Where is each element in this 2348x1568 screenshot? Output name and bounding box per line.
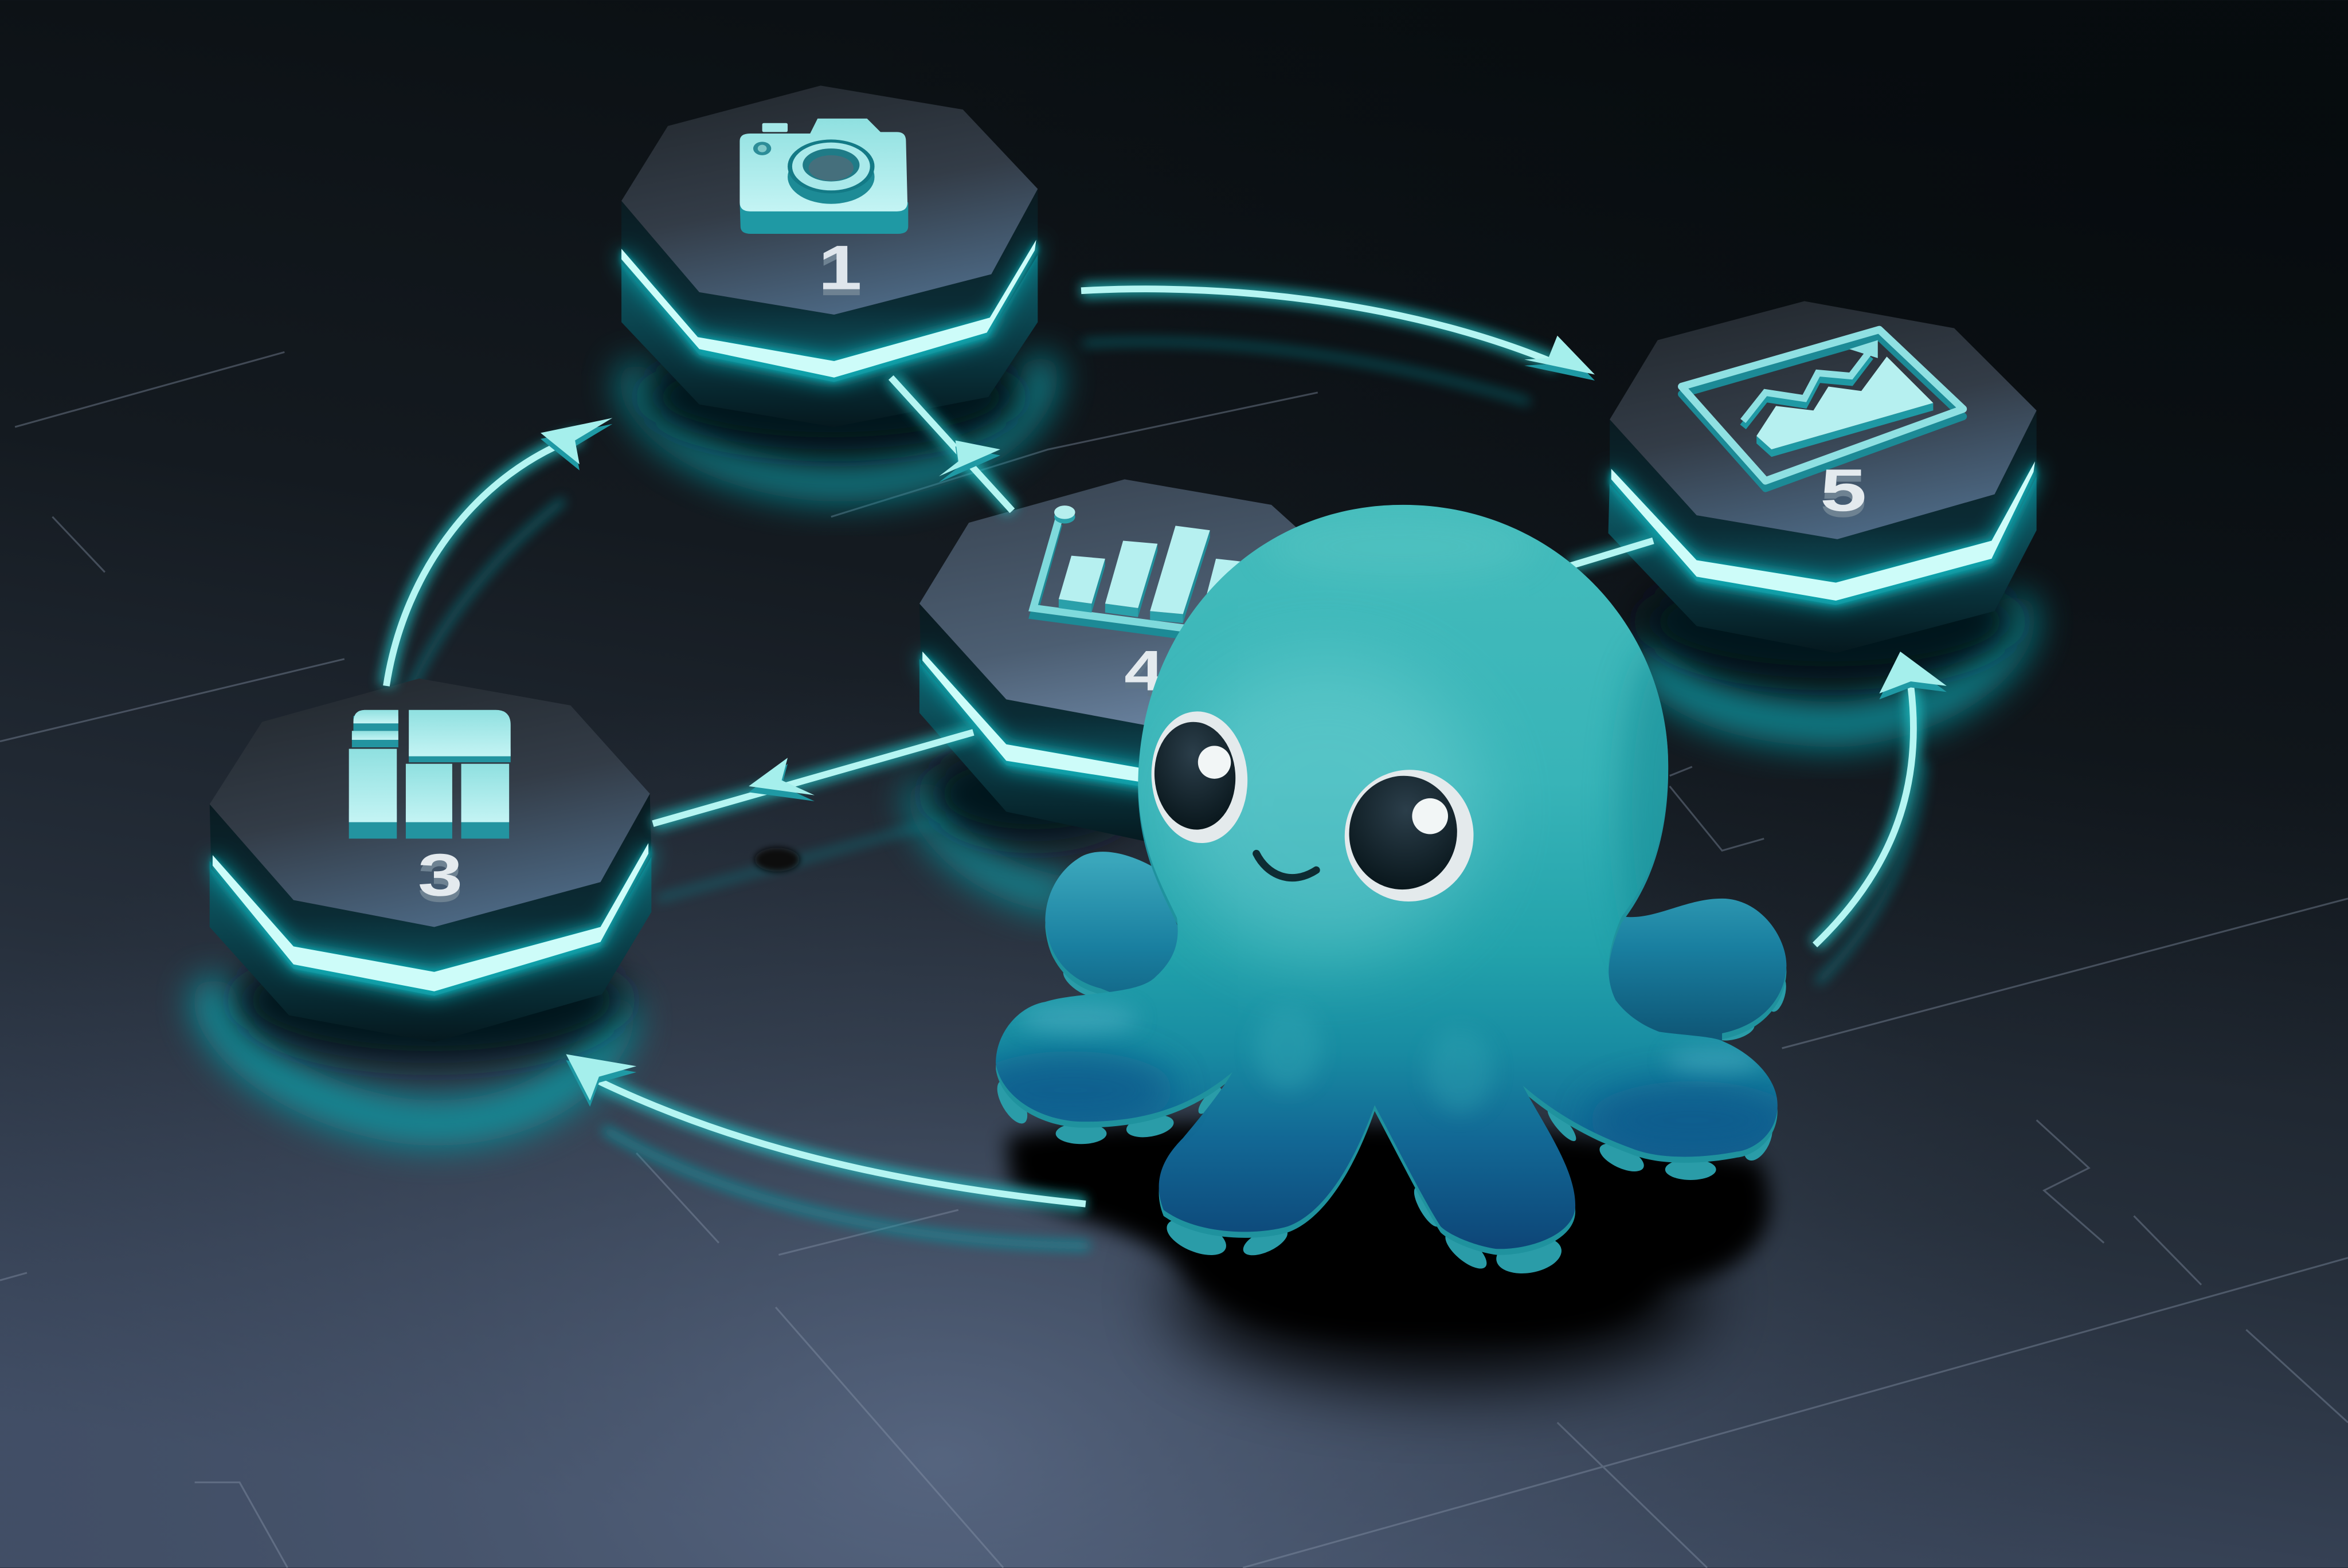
arrow: 1 to 5: [1081, 289, 1595, 381]
small dark mark on floor: [755, 848, 800, 872]
number 1: 1: [818, 239, 862, 309]
icon: bar chart: [1033, 505, 1243, 637]
number 3: 3: [418, 848, 463, 915]
number 4: 4: [1124, 645, 1164, 708]
octopus mascot: [966, 505, 1797, 1278]
floor glow reflections: [214, 342, 2014, 1246]
panel: platform 3 treemap: [210, 679, 651, 1042]
body and front arms: [966, 505, 1797, 1255]
arrow: 4 to 3: [653, 732, 973, 824]
arms: back: [1045, 852, 1786, 1055]
panel: platform 4 bar chart: [919, 479, 1318, 846]
panel: platform 5 line chart: [1609, 301, 2037, 653]
number 1: 1: [818, 233, 862, 303]
arrow: 3 to 1: [386, 418, 612, 686]
eye: left: [1147, 708, 1252, 846]
number 3: 3: [418, 842, 463, 908]
octopus shadow: [1006, 1121, 1770, 1382]
number 5: 5: [1820, 462, 1866, 530]
arrow: 4 to 1: [891, 378, 1012, 511]
icon: line chart: [1682, 330, 1963, 488]
panel: platform 1 camera: [621, 85, 1038, 427]
eye: right: [1336, 762, 1482, 910]
icon: camera: [739, 119, 908, 234]
number 4: 4: [1124, 639, 1164, 703]
smile: [1257, 853, 1316, 878]
arrow: octopus to 3: [566, 1055, 1086, 1204]
platform ground shadows: [237, 344, 2017, 1063]
icon: treemap: [349, 710, 511, 838]
arrow: octopus to 5: [1815, 652, 1947, 945]
connector: 4 to 5: [1570, 541, 1653, 566]
suckers: [991, 922, 1789, 1278]
number 5: 5: [1820, 457, 1866, 523]
